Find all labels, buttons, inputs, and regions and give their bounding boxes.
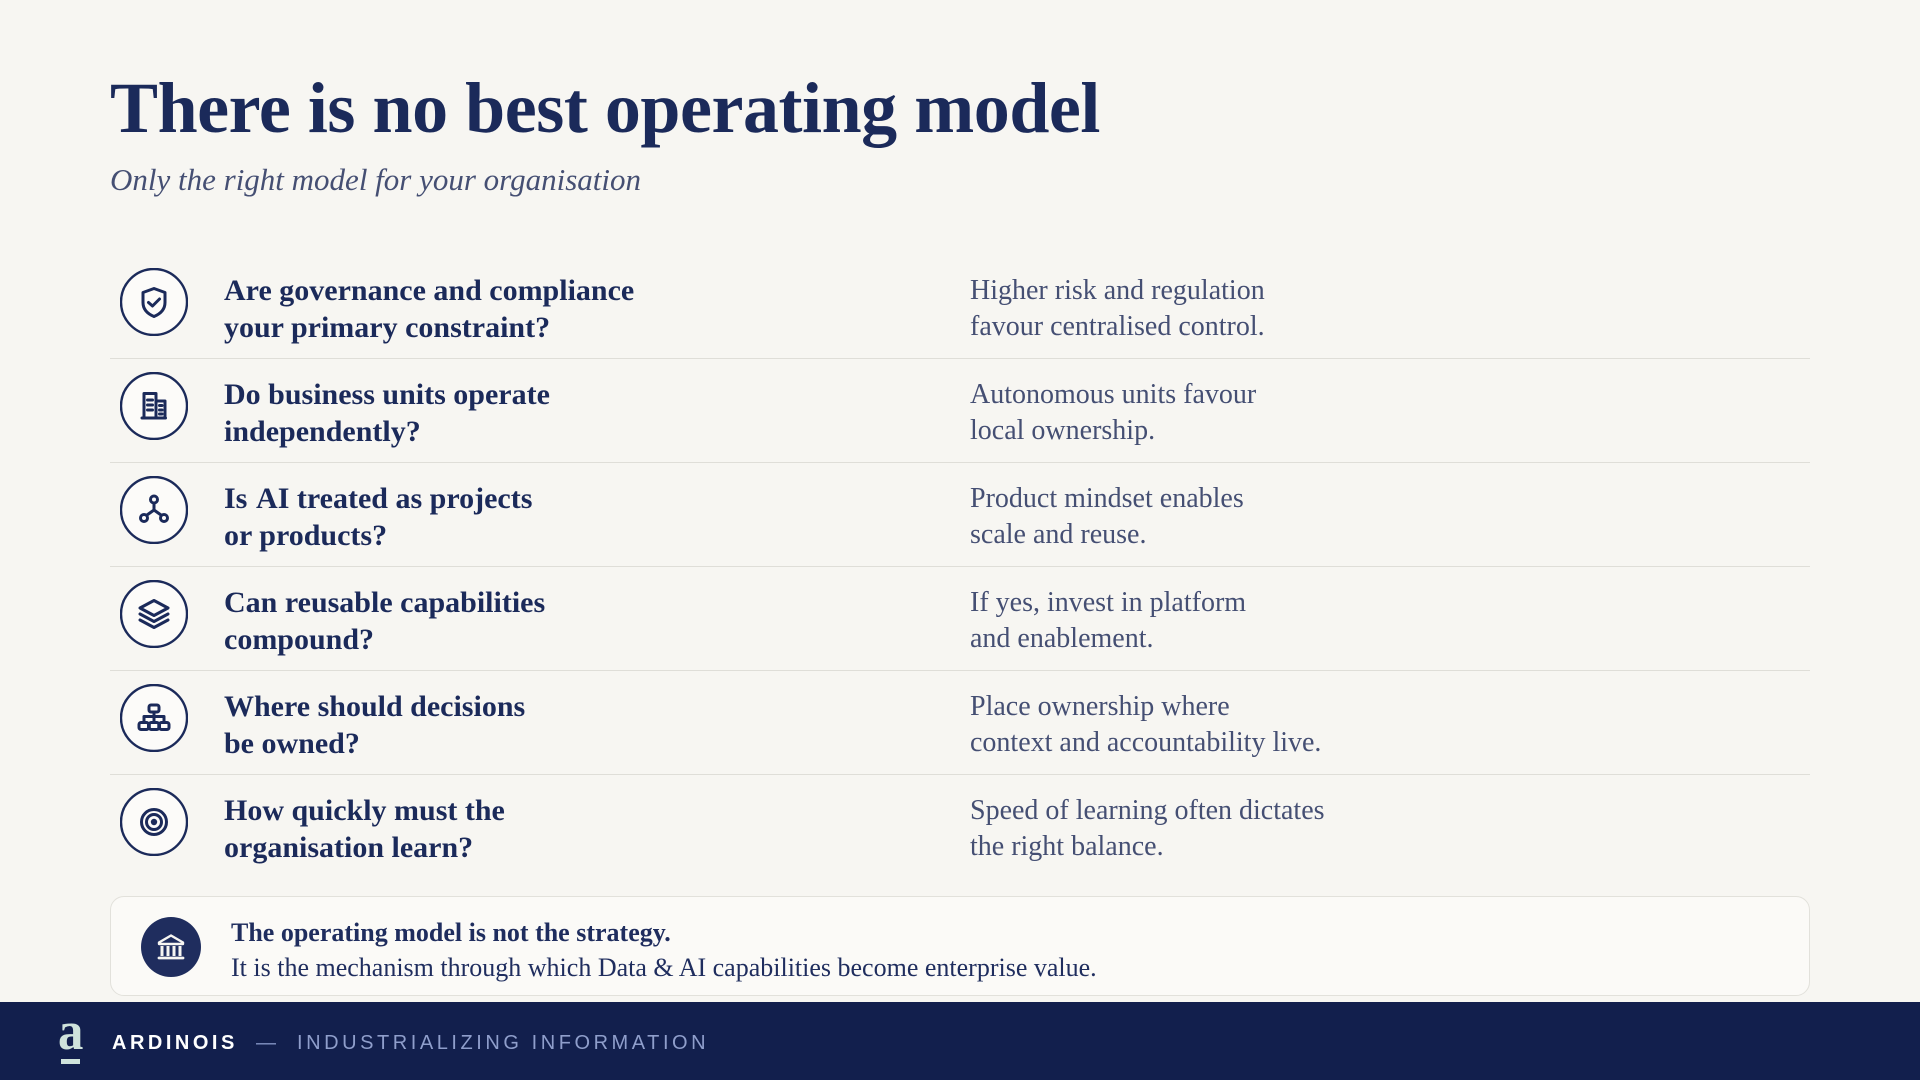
callout text: The operating model is not the strategy. — [231, 918, 671, 947]
callout card — [110, 896, 1810, 996]
question 6: organisation learn? — [224, 831, 473, 864]
question 3: Is AI treated as projects — [224, 482, 532, 515]
footer bar — [0, 1002, 1920, 1080]
answer 1 — [970, 275, 1265, 342]
question 2 — [224, 378, 550, 448]
icon: institution — [141, 917, 201, 977]
question 1: your primary constraint? — [224, 311, 550, 344]
answer 2 — [970, 379, 1256, 446]
icon: org chart — [120, 684, 188, 752]
question 3: or products? — [224, 519, 387, 552]
icon: layers — [120, 580, 188, 648]
brand text: ARDINOIS — [112, 1032, 238, 1054]
subtitle: Only the right model for your organisation — [110, 162, 641, 197]
question 2: Do business units operate — [224, 378, 550, 411]
icon: target — [120, 788, 188, 856]
icon: network nodes — [120, 476, 188, 544]
answer 2: local ownership. — [970, 415, 1155, 446]
logo: a — [58, 1001, 83, 1061]
answer 4: and enablement. — [970, 623, 1153, 654]
answer 1: favour centralised control. — [970, 311, 1265, 342]
tagline: INDUSTRIALIZING INFORMATION — [297, 1032, 709, 1054]
icon: building — [120, 372, 188, 440]
dash: — — [256, 1032, 276, 1054]
answer 5 — [970, 691, 1321, 758]
answer 3 — [970, 483, 1244, 550]
question 5: be owned? — [224, 727, 360, 760]
question 6: How quickly must the — [224, 794, 505, 827]
question 5: Where should decisions — [224, 690, 525, 723]
answer 5: Place ownership where — [970, 691, 1230, 722]
answer 6: the right balance. — [970, 831, 1164, 862]
answer 4 — [970, 587, 1246, 654]
answer 4: If yes, invest in platform — [970, 587, 1246, 618]
answer 3: scale and reuse. — [970, 519, 1146, 550]
row dividers — [110, 358, 1810, 359]
question 4 — [224, 586, 545, 656]
answer 2: Autonomous units favour — [970, 379, 1256, 410]
answer 1: Higher risk and regulation — [970, 275, 1265, 306]
question 5 — [224, 690, 525, 760]
answer 6 — [970, 795, 1325, 862]
answer 3: Product mindset enables — [970, 483, 1244, 514]
question 4: compound? — [224, 623, 374, 656]
answer 5: context and accountability live. — [970, 727, 1321, 758]
question 4: Can reusable capabilities — [224, 586, 545, 619]
question 1 — [224, 274, 634, 344]
question 1: Are governance and compliance — [224, 274, 634, 307]
callout text — [231, 918, 1097, 982]
answer 6: Speed of learning often dictates — [970, 795, 1325, 826]
callout text: It is the mechanism through which Data & AI capabilities become enterprise value. — [231, 953, 1097, 982]
question 3 — [224, 482, 532, 552]
question 2: independently? — [224, 415, 421, 448]
icon: shield with check — [120, 268, 188, 336]
question 6 — [224, 794, 505, 864]
title: There is no best operating model — [110, 68, 1100, 148]
